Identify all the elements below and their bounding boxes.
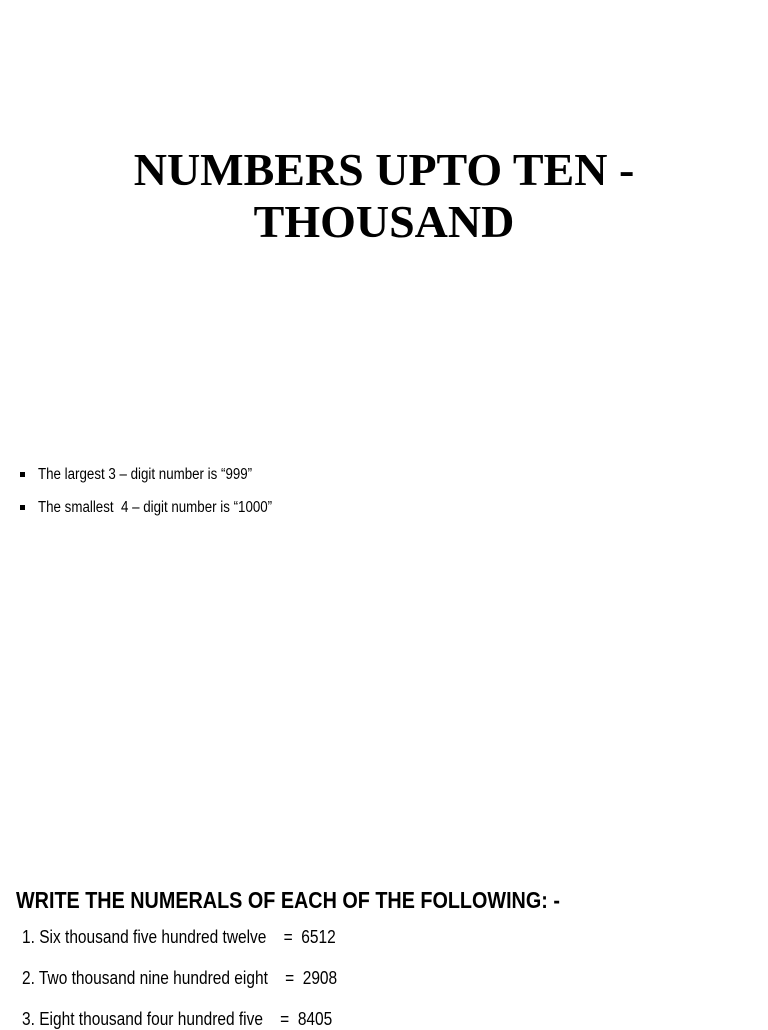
title: NUMBERS UPTO TEN - bbox=[134, 144, 634, 195]
exercise list bbox=[22, 927, 337, 1029]
bullet list: The smallest 4 – digit number is “1000” bbox=[38, 499, 272, 516]
title: THOUSAND bbox=[254, 196, 514, 247]
item 1: 1. Six thousand five hundred twelve = 6512 bbox=[22, 927, 336, 947]
bullet 2 bbox=[20, 499, 272, 516]
bullet 1 bbox=[20, 466, 252, 483]
item 3: 3. Eight thousand four hundred five = 8405 bbox=[22, 1009, 332, 1029]
item 2: 2. Two thousand nine hundred eight = 2908 bbox=[22, 968, 337, 988]
title bbox=[134, 144, 634, 247]
heading: WRITE THE NUMERALS OF EACH OF THE FOLLOWING: - bbox=[16, 887, 560, 913]
bullet list bbox=[20, 466, 272, 516]
bullet list: The largest 3 – digit number is “999” bbox=[38, 466, 252, 483]
